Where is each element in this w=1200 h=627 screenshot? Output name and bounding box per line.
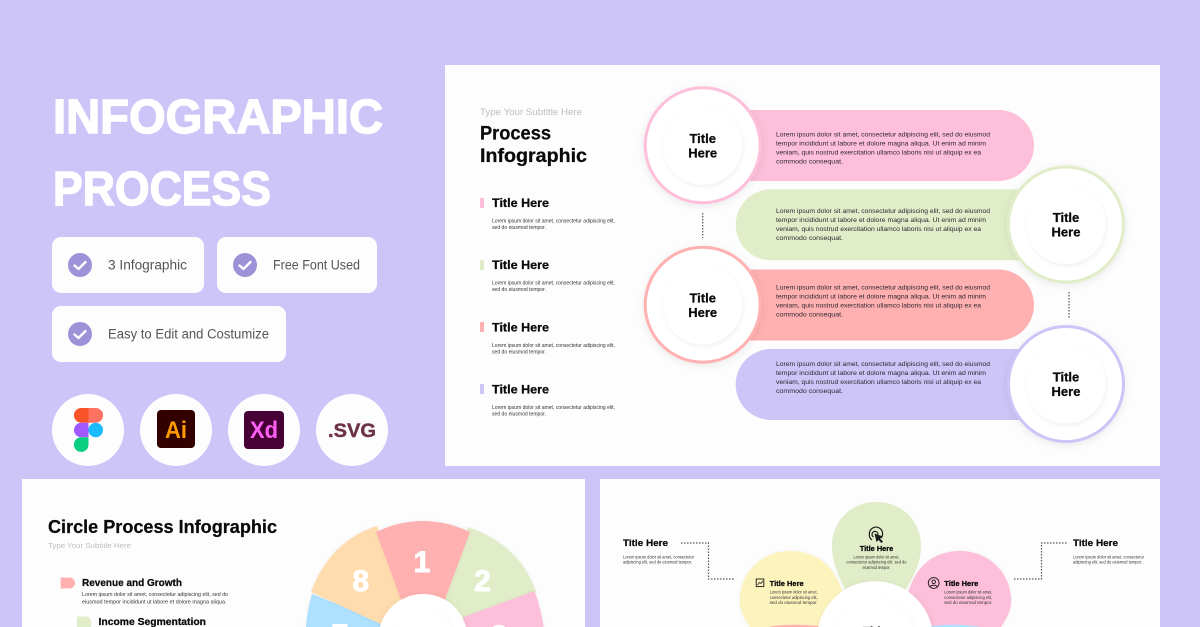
segment 7 xyxy=(306,594,385,627)
number 1: 1 xyxy=(414,546,430,579)
feature badge: Free Font Used: Free Font Used xyxy=(273,258,360,272)
icon: Adobe XD: Xd xyxy=(250,417,278,444)
circle node: red: Here xyxy=(688,305,717,320)
icon: Adobe Illustrator xyxy=(140,394,212,466)
list item 1: Lorem ipsum dolor sit amet, consectetur adipiscing elit, xyxy=(492,218,615,224)
connector: left dotted line xyxy=(702,213,704,238)
connector: right dotted line xyxy=(1068,292,1070,318)
panel: blob process infographic xyxy=(600,479,1160,627)
circle node: green: Title xyxy=(1053,210,1079,225)
arrow: left dotted connector xyxy=(681,543,735,579)
list item 4: Lorem ipsum dolor sit amet, consectetur adipiscing elit, xyxy=(492,405,615,411)
panel: circle process infographic xyxy=(22,479,585,627)
legend: Revenue and Growth: Lorem ipsum dolor sit amet, consectetur adipiscing elit, sed do xyxy=(82,592,228,598)
title xyxy=(53,91,383,216)
list item 4 xyxy=(480,383,615,418)
feature badge: 3 Infographic xyxy=(52,237,204,293)
callout: right xyxy=(1073,538,1145,564)
icon: SVG: .SVG xyxy=(328,421,376,442)
bar: purple: veniam, quis nostrud exercitation ullamco laboris nisi ut aliquip ex ea xyxy=(776,379,981,386)
subtitle: Type Your Subtitle Here xyxy=(48,541,131,550)
blob: pink xyxy=(907,551,1011,627)
circle node: red: Title xyxy=(689,290,716,305)
bar: pink: veniam, quis nostrud exercitation ullamco laboris nisi ut aliquip ex ea xyxy=(776,150,981,156)
icon: cursor target xyxy=(869,527,883,543)
blob: green: eiusmod tempor. xyxy=(862,565,890,570)
list item 3: Lorem ipsum dolor sit amet, consectetur adipiscing elit, xyxy=(492,343,615,349)
feature badge: 3 Infographic: 3 Infographic xyxy=(108,258,187,272)
icon: user xyxy=(928,578,939,588)
arrow: right dotted connector xyxy=(1014,543,1068,579)
subtitle: Type Your Subtitle Here xyxy=(480,107,582,118)
blob: blue xyxy=(925,625,982,627)
heading: Process xyxy=(480,124,551,144)
segment 8 xyxy=(311,526,405,626)
callout: left: adipiscing elit, sed do eiusmod tempor. xyxy=(623,560,692,564)
list item 3: Title Here xyxy=(492,320,549,334)
segment 3 xyxy=(460,591,544,627)
legend: Revenue and Growth xyxy=(61,578,228,606)
bar: green: commodo consequat. xyxy=(776,235,843,242)
feature badge: Easy to Edit and Costumize xyxy=(52,306,286,362)
heading: Circle Process Infographic xyxy=(48,517,277,537)
blob: pink: sed do eiusmod tempor. xyxy=(944,600,992,605)
icon: SVG xyxy=(316,394,388,466)
bar: green: tempor incididunt ut labore et dolore magna aliqua. Ut enim ad minim xyxy=(776,217,986,224)
icon: chart xyxy=(756,579,764,587)
circle node: green xyxy=(1008,167,1124,282)
number 2: 2 xyxy=(474,565,491,598)
title: PROCESS xyxy=(53,163,271,216)
wheel hub xyxy=(380,594,466,627)
bar: red: tempor incididunt ut labore et dolore magna aliqua. Ut enim ad minim xyxy=(776,294,986,300)
bar: pink: tempor incididunt ut labore et dolore magna aliqua. Ut enim ad minim xyxy=(776,140,986,148)
circle node: purple: Here xyxy=(1052,384,1080,399)
feature badge: Free Font Used xyxy=(217,237,377,293)
list item 3 xyxy=(480,320,615,355)
legend: Revenue and Growth: Revenue and Growth xyxy=(82,578,182,589)
legend: Revenue and Growth: eiusmod tempor incididunt ut labore et dolore magna aliqua. xyxy=(82,600,226,606)
wheel chart xyxy=(306,521,544,627)
callout: right: Title Here xyxy=(1073,538,1118,549)
bar: pink xyxy=(720,110,1034,181)
segment 1 xyxy=(376,521,470,602)
list item 1 xyxy=(480,196,615,231)
list item 3: sed do eiusmod tempor. xyxy=(492,349,546,355)
blob: pink: Title Here xyxy=(944,581,978,588)
icon: Adobe XD xyxy=(228,394,300,466)
bar: pink: commodo consequat. xyxy=(776,158,843,166)
bar: green xyxy=(736,189,1080,260)
icon: Adobe Illustrator: Ai xyxy=(165,417,187,444)
title: INFOGRAPHIC xyxy=(53,91,383,144)
panel: process infographic xyxy=(445,65,1160,466)
list item 2 xyxy=(480,258,615,293)
circle node: pink: Title xyxy=(689,131,716,146)
circle node: pink xyxy=(645,88,760,203)
list item 4: Title Here xyxy=(492,383,549,397)
blob: green: consectetur adipiscing elit, sed do xyxy=(846,560,907,565)
circle node: pink: Here xyxy=(688,146,717,160)
central circle xyxy=(818,581,932,627)
blob: yellow: Lorem ipsum dolor sit amet, xyxy=(770,590,818,594)
callout: right: Lorem ipsum dolor sit amet, consectetur xyxy=(1073,554,1145,559)
bar: purple xyxy=(736,349,1080,420)
blob: green xyxy=(832,502,921,590)
blob: yellow: sed do eiusmod tempor. xyxy=(770,600,818,605)
blob: pink: Lorem ipsum dolor sit amet, xyxy=(944,590,992,594)
bar: red: commodo consequat. xyxy=(776,312,843,318)
callout: right: adipiscing elit, sed do eiusmod tempor. xyxy=(1073,560,1142,564)
heading xyxy=(480,124,587,167)
bar: green: veniam, quis nostrud exercitation ullamco laboris nisi ut aliquip ex ea xyxy=(776,226,981,233)
heading: Infographic xyxy=(480,146,587,167)
blob: yellow: Title Here xyxy=(770,581,804,588)
list item 4: sed do eiusmod tempor. xyxy=(492,412,546,418)
list item 1: sed do eiusmod tempor. xyxy=(492,225,546,231)
callout: left: Title Here xyxy=(623,538,668,549)
bar: green: Lorem ipsum dolor sit amet, consectetur adipiscing elit, sed do eiusmod xyxy=(776,208,990,215)
callout: left: Lorem ipsum dolor sit amet, consectetur xyxy=(623,554,695,559)
bar: red: veniam, quis nostrud exercitation ullamco laboris nisi ut aliquip ex ea xyxy=(776,302,981,310)
circle node: red xyxy=(645,247,760,362)
circle node: green: Here xyxy=(1052,224,1080,240)
bar: purple: tempor incididunt ut labore et dolore magna aliqua. Ut enim ad minim xyxy=(776,370,986,377)
blob: green: Lorem ipsum dolor sit amet, xyxy=(854,554,900,560)
feature badge: Easy to Edit and Costumize: Easy to Edit and Costumize xyxy=(108,326,269,342)
number 8: 8 xyxy=(352,565,369,598)
icon: Figma xyxy=(52,394,124,466)
segment 2 xyxy=(444,527,536,622)
list item 2: sed do eiusmod tempor. xyxy=(492,287,546,293)
blob: yellow: consectetur adipiscing elit, xyxy=(770,595,818,600)
blob: yellow xyxy=(740,551,844,627)
list item 2: Lorem ipsum dolor sit amet, consectetur adipiscing elit, xyxy=(492,281,615,287)
bar: red: Lorem ipsum dolor sit amet, consectetur adipiscing elit, sed do eiusmod xyxy=(776,284,990,292)
bar: pink: Lorem ipsum dolor sit amet, consectetur adipiscing elit, sed do eiusmod xyxy=(776,132,990,138)
callout: left xyxy=(623,538,695,564)
bar: red xyxy=(720,270,1034,340)
circle node: purple: Title xyxy=(1053,370,1079,384)
circle node: purple xyxy=(1008,326,1124,442)
blob: red xyxy=(768,625,825,627)
bar: purple: commodo consequat. xyxy=(776,388,843,395)
blob: green: Title Here xyxy=(860,546,893,553)
bar: purple: Lorem ipsum dolor sit amet, consectetur adipiscing elit, sed do eiusmod xyxy=(776,361,990,368)
list item 2: Title Here xyxy=(492,258,549,272)
blob: pink: consectetur adipiscing elit, xyxy=(944,595,992,600)
list item 1: Title Here xyxy=(492,196,549,210)
